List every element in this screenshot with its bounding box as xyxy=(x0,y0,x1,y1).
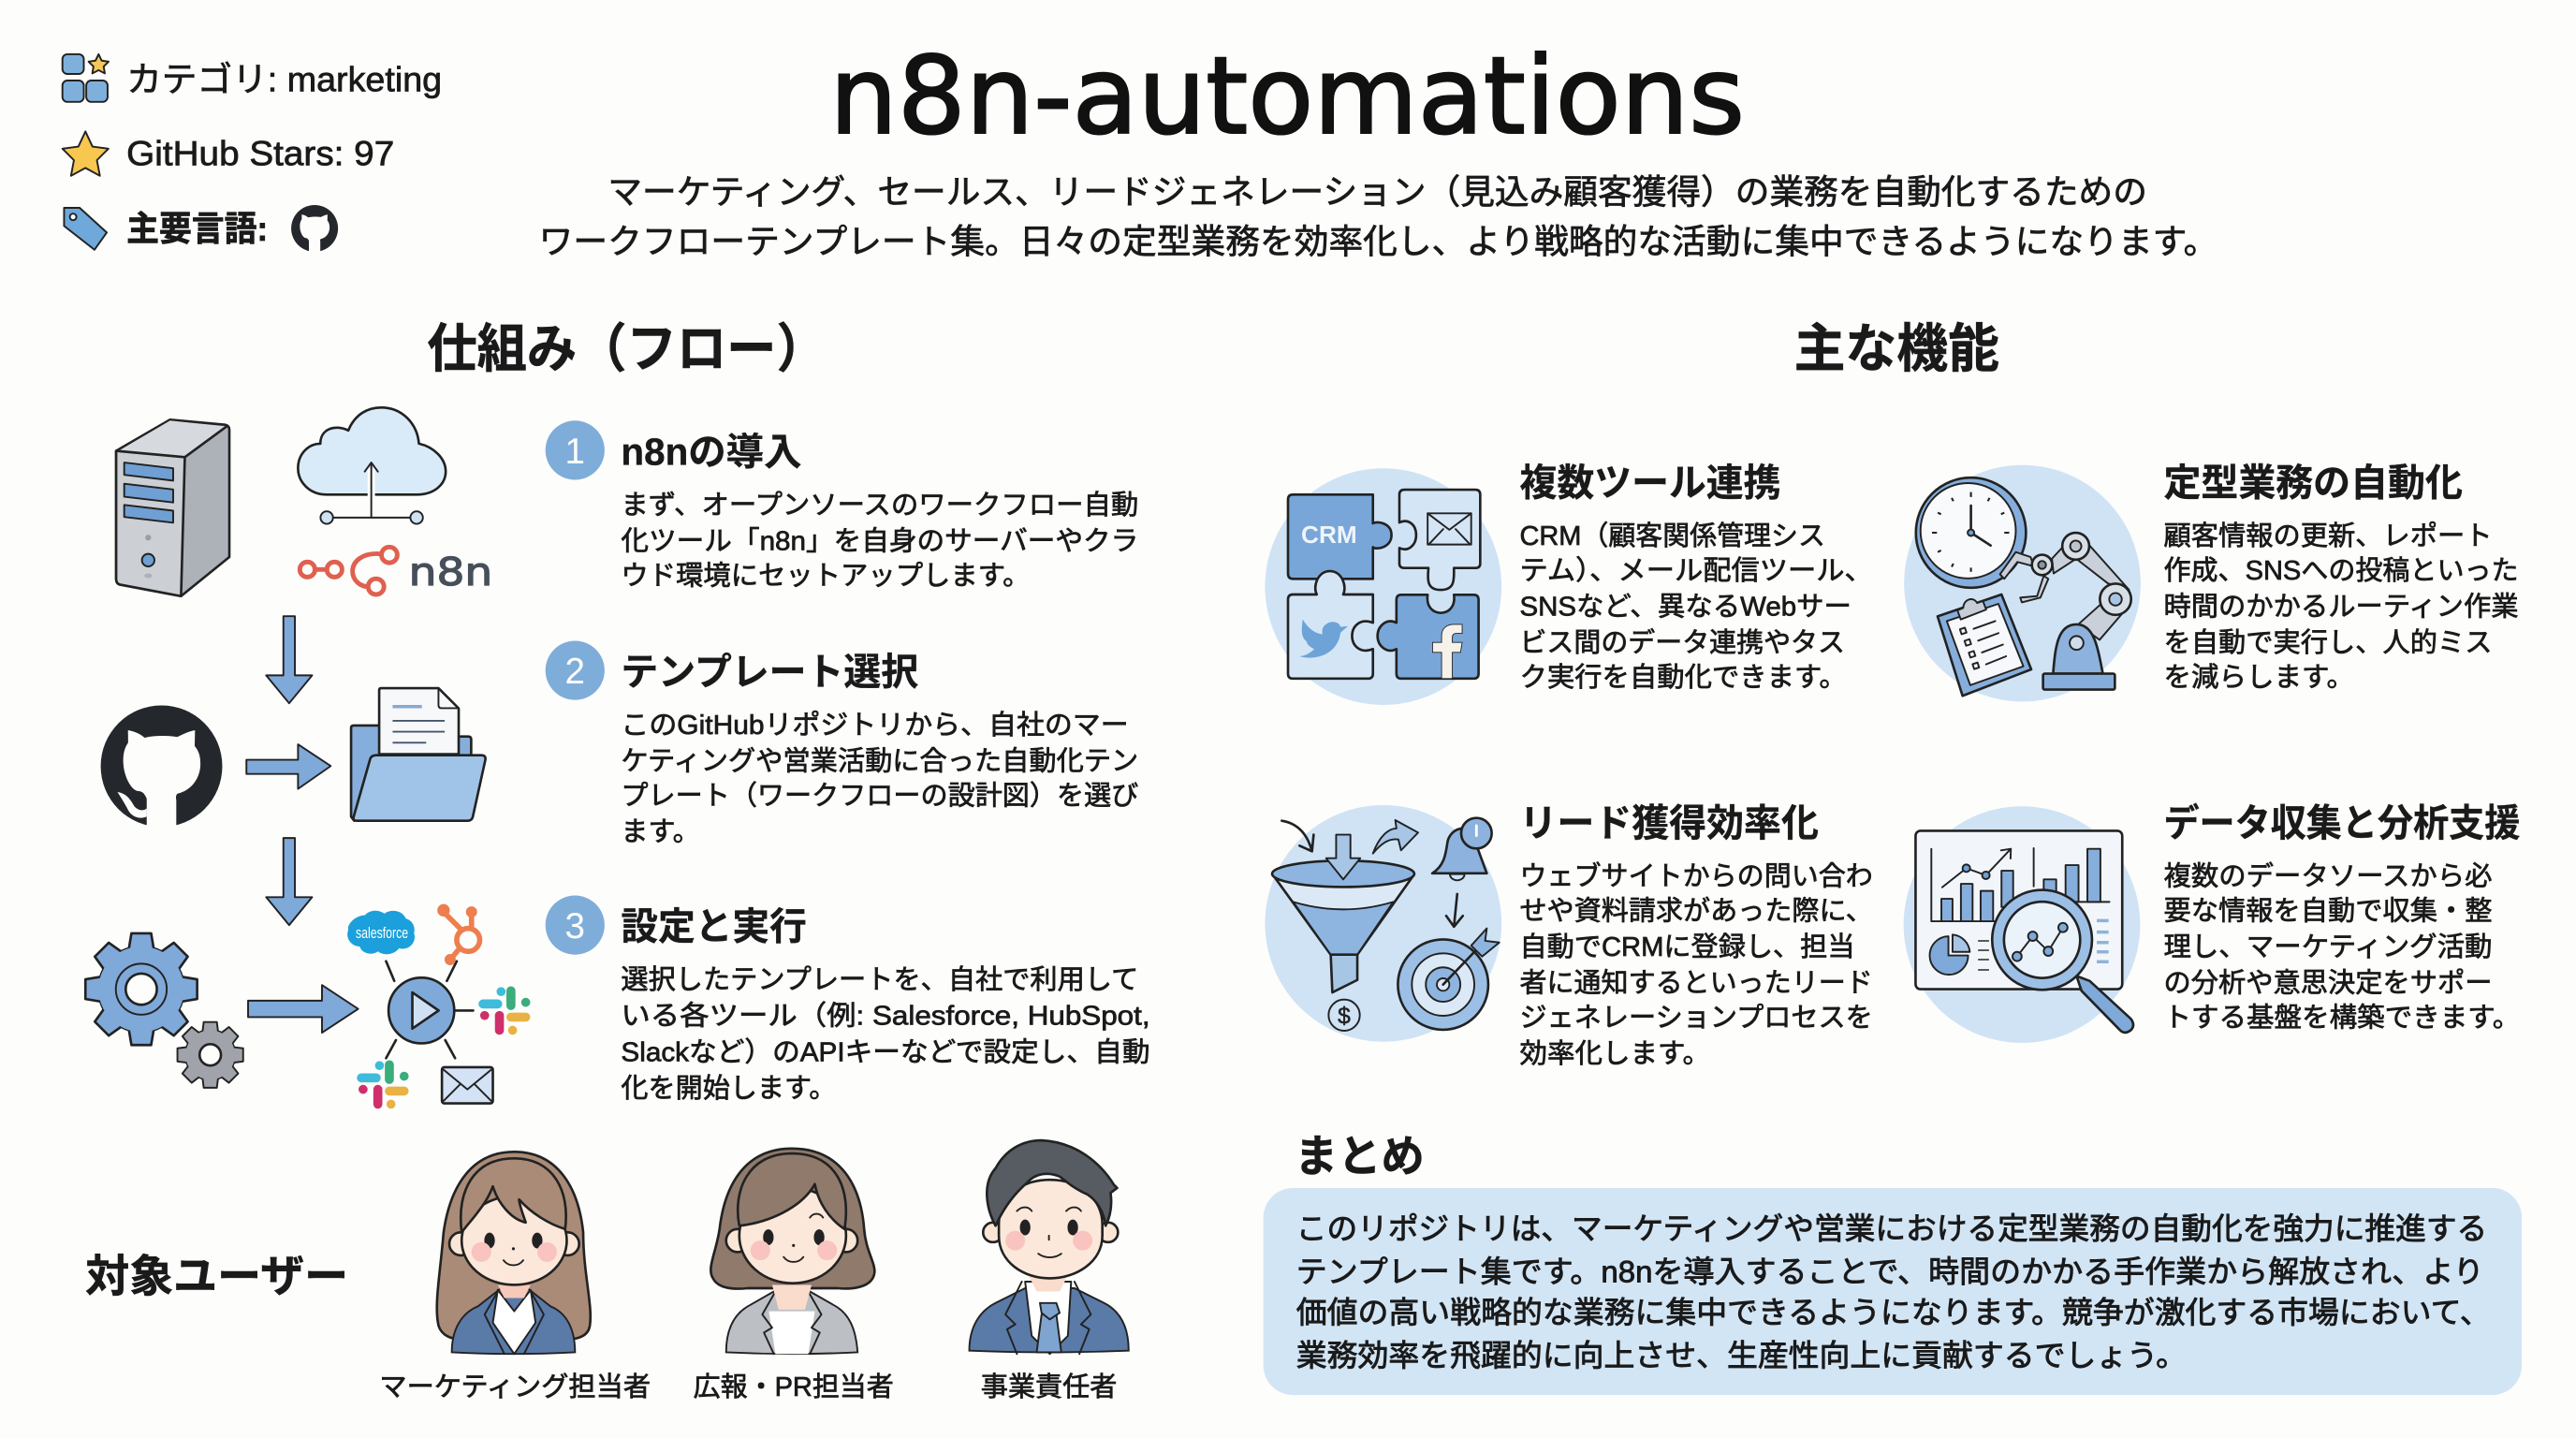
feature 2 body: を自動で実行し、人的ミス xyxy=(2163,627,2492,658)
feature 2 body: 作成、SNSへの投稿といった xyxy=(2163,555,2519,586)
badge 2: 2 xyxy=(565,652,585,692)
icon: puzzle xyxy=(1265,468,1501,705)
feature 3 title: リード獲得効率化 xyxy=(1519,801,1819,844)
icon: github small xyxy=(291,205,338,253)
icon: funnel target bell xyxy=(1265,805,1501,1042)
step 2 body: このGitHubリポジトリから、自社のマー xyxy=(621,710,1129,741)
panel: summary: 価値の高い戦略的な業務に集中できるようになります。競争が激化する市場において、 xyxy=(1296,1295,2491,1329)
icon: slack 1 xyxy=(483,990,526,1030)
arrow: right 2 xyxy=(248,985,359,1033)
text: github stars: GitHub Stars: 97 xyxy=(126,134,394,172)
panel: feature routine automation xyxy=(1904,462,2519,701)
icon: workflow hub xyxy=(386,961,473,1058)
icon: n8n logo xyxy=(300,547,492,594)
text: salesforce logo: salesforce xyxy=(356,924,408,942)
step 1 body: まず、オープンソースのワークフロー自動 xyxy=(621,490,1138,521)
meta info block xyxy=(63,54,442,253)
feature 1 body: ク実行を自動化できます。 xyxy=(1519,662,1847,693)
heading: how it works: 仕組み（フロー） xyxy=(427,319,827,378)
step 3 title: 設定と実行 xyxy=(621,905,807,948)
step 1 title: n8nの導入 xyxy=(621,430,801,473)
person: marketing xyxy=(379,1152,651,1402)
arrow: right 1 xyxy=(246,744,330,789)
icon: clock robot arm xyxy=(1904,465,2141,701)
feature 2 title: 定型業務の自動化 xyxy=(2163,462,2463,505)
step 2 body: プレート（ワークフローの設計図）を選び xyxy=(621,780,1138,811)
feature 1 body: ビス間のデータ連携やタス xyxy=(1519,627,1845,658)
panel: feature lead generation xyxy=(1265,801,1873,1069)
step 3 body: いる各ツール（例: Salesforce, HubSpot, xyxy=(621,1001,1150,1032)
subtitle xyxy=(539,173,2217,260)
person: pr xyxy=(694,1149,894,1402)
person: business owner xyxy=(970,1140,1129,1402)
feature 4 body: の分析や意思決定をサポー xyxy=(2163,968,2492,999)
panel: summary: 業務効率を飛躍的に向上させ、生産性向上に貢献するでしょう。 xyxy=(1296,1338,2187,1372)
feature 4 body: トする基盤を構築できます。 xyxy=(2163,1002,2520,1033)
heading: target users: 対象ユーザー xyxy=(85,1253,348,1302)
step 1 body: ウド環境にセットアップします。 xyxy=(621,560,1030,591)
feature 3 body: ジェネレーションプロセスを xyxy=(1519,1003,1873,1033)
badge 3: 3 xyxy=(565,906,585,946)
step 3 body: Slackなど）のAPIキーなどで設定し、自動 xyxy=(621,1036,1150,1067)
title: n8n-automations xyxy=(829,34,1745,158)
feature 2 body: 顧客情報の更新、レポート xyxy=(2163,521,2492,551)
step 3 xyxy=(546,896,1150,1104)
feature 3 body: 自動でCRMに登録し、担当 xyxy=(1519,932,1855,962)
arrow: down 2 xyxy=(266,838,312,925)
feature 1 title: 複数ツール連携 xyxy=(1519,462,1781,505)
feature 1 body xyxy=(1519,521,1873,693)
step 1 xyxy=(546,420,1138,591)
icon: cloud upload xyxy=(298,407,446,524)
feature 4 body: 理し、マーケティング活動 xyxy=(2163,932,2492,962)
subtitle: ワークフローテンプレート集。日々の定型業務を効率化し、より戦略的な活動に集中できるようになります。 xyxy=(539,222,2217,260)
icon: folder xyxy=(351,688,486,821)
step 2 body: ケティングや営業活動に合った自動化テン xyxy=(621,746,1138,777)
panel: steps xyxy=(546,420,1150,1104)
feature 2 body: 時間のかかるルーティン作業 xyxy=(2163,592,2519,623)
text: dollar sign: $ xyxy=(1338,1004,1351,1029)
feature 3 body: せや資料請求があった際に、 xyxy=(1519,895,1873,926)
panel: summary: このリポジトリは、マーケティングや営業における定型業務の自動化を強力に推進する xyxy=(1296,1211,2487,1246)
step 2 xyxy=(546,640,1138,847)
icon: tag xyxy=(64,208,107,250)
icon: github large xyxy=(101,705,222,829)
icon: server xyxy=(116,419,229,596)
text: owner label: 事業責任者 xyxy=(981,1372,1117,1402)
feature 3 body: ウェブサイトからの問い合わ xyxy=(1519,860,1873,891)
panel: feature data analysis xyxy=(1904,801,2520,1043)
icon: small gear xyxy=(178,1022,243,1088)
feature 1 body: テム）、メール配信ツール、 xyxy=(1519,555,1873,586)
feature 3 body: 効率化します。 xyxy=(1519,1038,1710,1069)
badge 1: 1 xyxy=(565,432,585,472)
icon: slack 2 xyxy=(361,1064,404,1104)
heading: main features: 主な機能 xyxy=(1794,319,1999,378)
feature 2 body xyxy=(2163,521,2519,693)
feature 3 body xyxy=(1519,860,1873,1069)
step 3 body xyxy=(621,964,1150,1104)
panel: flow illustration xyxy=(85,407,526,1104)
heading: summary: まとめ xyxy=(1295,1132,1425,1181)
step 1 body xyxy=(621,490,1138,591)
text: PR label: 広報・PR担当者 xyxy=(694,1372,894,1402)
feature 2 body: を減らします。 xyxy=(2163,662,2354,693)
panel: summary: テンプレート集です。n8nを導入することで、時間のかかる手作業から解放され、より xyxy=(1296,1254,2484,1288)
badge 3 xyxy=(546,896,605,955)
badge 2 xyxy=(546,640,605,700)
panel: target users xyxy=(85,1140,1129,1402)
text: n8n wordmark: n8n xyxy=(409,550,492,594)
feature 4 body: 要な情報を自動で収集・整 xyxy=(2163,895,2492,926)
icon: category grid xyxy=(63,54,109,102)
step 2 title: テンプレート選択 xyxy=(621,651,918,694)
text: marketing label: マーケティング担当者 xyxy=(379,1372,651,1402)
icon: large gear xyxy=(85,933,198,1045)
feature 4 title: データ収集と分析支援 xyxy=(2163,801,2520,844)
panel: summary xyxy=(1264,1188,2522,1395)
step 2 body: ます。 xyxy=(621,817,700,847)
icon: dashboard magnifier xyxy=(1904,806,2140,1043)
text: main language: 主要言語: xyxy=(126,210,268,248)
subtitle: マーケティング、セールス、リードジェネレーション（見込み顧客獲得）の業務を自動化するための xyxy=(607,173,2147,212)
feature 1 body: CRM（顧客関係管理シス xyxy=(1519,521,1825,551)
step 3 body: 化を開始します。 xyxy=(621,1073,836,1104)
feature 4 body: 複数のデータソースから必 xyxy=(2163,860,2492,891)
arrow: down 1 xyxy=(266,616,312,703)
badge 1 xyxy=(546,420,605,479)
step 3 body: 選択したテンプレートを、自社で利用して xyxy=(621,964,1138,995)
text: category: カテゴリ: marketing xyxy=(126,60,442,98)
icon: mail xyxy=(442,1067,493,1104)
text: CRM piece label: CRM xyxy=(1301,521,1357,549)
feature 4 body xyxy=(2163,860,2520,1033)
icon: hubspot xyxy=(440,906,479,962)
feature 3 body: 者に通知するといったリード xyxy=(1519,968,1873,999)
step 1 body: 化ツール「n8n」を自身のサーバーやクラ xyxy=(621,525,1138,556)
icon: star xyxy=(63,131,109,176)
panel: feature multi-tool xyxy=(1265,462,1873,705)
step 2 body xyxy=(621,710,1138,847)
icon: salesforce xyxy=(347,911,415,954)
feature 1 body: SNSなど、異なるWebサー xyxy=(1519,593,1852,623)
